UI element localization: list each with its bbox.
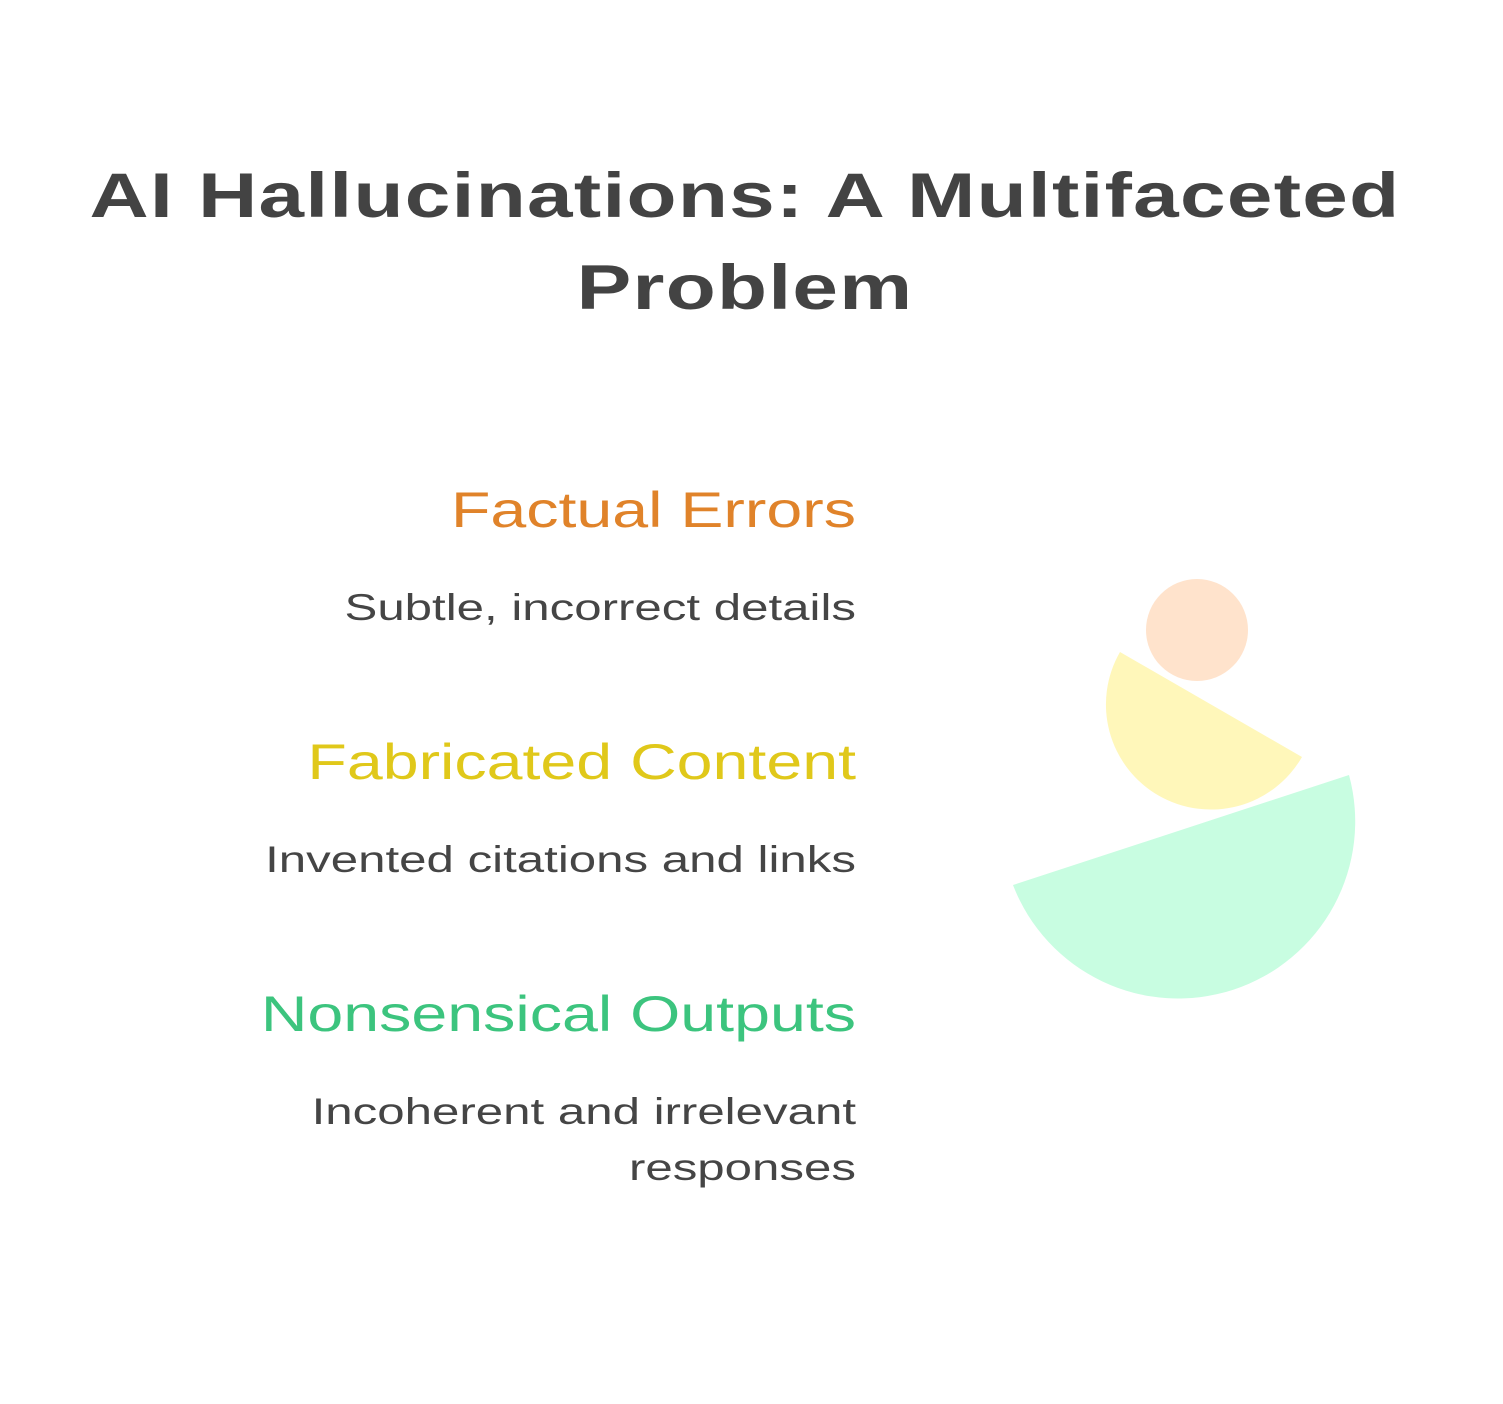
shape: yellow half disc <box>1106 652 1302 810</box>
description: nonsensical outputs: responses <box>629 1147 856 1188</box>
description: nonsensical outputs <box>312 1091 856 1188</box>
heading: nonsensical outputs: Nonsensical Outputs <box>261 986 856 1042</box>
item: fabricated content <box>265 734 856 880</box>
shape: orange circle <box>1146 579 1248 681</box>
description: factual errors: Subtle, incorrect details <box>344 587 856 628</box>
item: nonsensical outputs <box>261 986 856 1188</box>
item: factual errors <box>344 482 856 628</box>
heading: factual errors: Factual Errors <box>451 482 856 538</box>
description: nonsensical outputs: Incoherent and irrelevant <box>312 1091 856 1132</box>
shape: green half disc <box>1013 775 1355 998</box>
heading: fabricated content: Fabricated Content <box>307 734 856 790</box>
title: AI Hallucinations: A Multifaceted <box>90 161 1400 231</box>
title <box>90 161 1400 323</box>
title: Problem <box>577 253 913 323</box>
description: fabricated content: Invented citations and links <box>265 839 856 880</box>
